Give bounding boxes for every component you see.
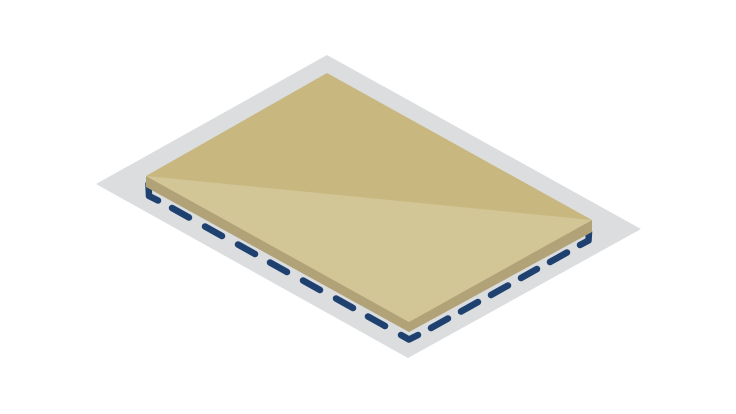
slab top surface bbox=[146, 73, 592, 322]
light reflection on top surface bbox=[146, 176, 592, 322]
dashed perimeter line bbox=[148, 184, 589, 340]
ground footprint bbox=[96, 55, 641, 358]
slab side faces bbox=[146, 176, 592, 332]
